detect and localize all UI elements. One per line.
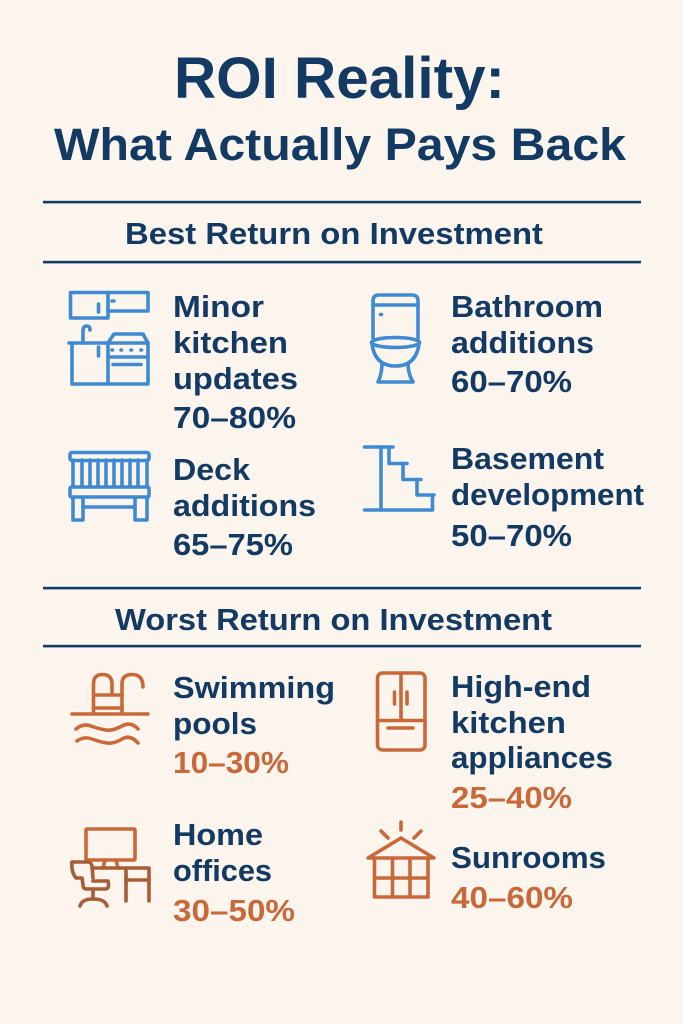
item: sunrooms <box>368 822 606 915</box>
icon: toilet <box>372 295 420 382</box>
icon: office desk and chair <box>72 829 149 906</box>
text: high-end kitchen appliances: kitchen <box>451 705 566 740</box>
text: sunrooms: 40–60% <box>451 880 573 915</box>
item: high-end kitchen appliances <box>378 669 613 815</box>
panel: worst return items <box>72 669 613 928</box>
item: bathroom additions <box>372 289 603 399</box>
text: basement development: development <box>451 477 644 512</box>
text: minor kitchen updates: Minor <box>173 289 264 324</box>
text: high-end kitchen appliances: appliances <box>451 740 613 775</box>
text: basement development: 50–70% <box>451 518 572 553</box>
icon: refrigerator <box>378 673 425 750</box>
text: swimming pools: pools <box>173 706 257 741</box>
item: swimming pools <box>72 670 335 780</box>
text: deck additions: additions <box>173 488 316 523</box>
text: bathroom additions <box>451 289 603 399</box>
text: swimming pools: Swimming <box>173 670 335 705</box>
text: high-end kitchen appliances <box>451 669 613 815</box>
text: swimming pools <box>173 670 335 780</box>
title: What Actually Pays Back <box>54 119 627 170</box>
text: minor kitchen updates: kitchen <box>173 325 288 360</box>
item: home offices <box>72 817 295 928</box>
text: deck additions: Deck <box>173 452 251 487</box>
text: bathroom additions: additions <box>451 325 594 360</box>
icon: deck <box>70 452 149 520</box>
text: high-end kitchen appliances: 25–40% <box>451 780 572 815</box>
text: deck additions <box>173 452 316 562</box>
title <box>54 46 627 170</box>
text: bathroom additions: 60–70% <box>451 364 572 399</box>
text: home offices: 30–50% <box>173 893 295 928</box>
text: basement development <box>451 441 644 553</box>
text: high-end kitchen appliances: High-end <box>451 669 591 704</box>
text: basement development: Basement <box>451 441 604 476</box>
text: bathroom additions: Bathroom <box>451 289 603 324</box>
heading: worst return: Worst Return on Investment <box>115 602 552 637</box>
icon: stairs <box>364 447 434 510</box>
text: sunrooms: Sunrooms <box>451 840 606 875</box>
text: home offices <box>173 817 295 928</box>
text: deck additions: 65–75% <box>173 527 293 562</box>
item: minor kitchen updates <box>69 289 298 435</box>
text: home offices: offices <box>173 853 272 888</box>
heading: best return: Best Return on Investment <box>125 216 543 251</box>
text: minor kitchen updates: updates <box>173 361 298 396</box>
icon: pool <box>72 674 148 743</box>
icon: sunroom <box>368 822 434 897</box>
text: home offices: Home <box>173 817 263 852</box>
text: minor kitchen updates <box>173 289 298 435</box>
icon: kitchen <box>69 292 148 384</box>
item: deck additions <box>70 452 316 562</box>
text: sunrooms <box>451 840 606 915</box>
text: swimming pools: 10–30% <box>173 745 289 780</box>
item: basement development <box>364 441 644 553</box>
text: minor kitchen updates: 70–80% <box>173 400 296 435</box>
title: ROI Reality: <box>174 46 505 111</box>
panel: best return items <box>69 289 644 562</box>
